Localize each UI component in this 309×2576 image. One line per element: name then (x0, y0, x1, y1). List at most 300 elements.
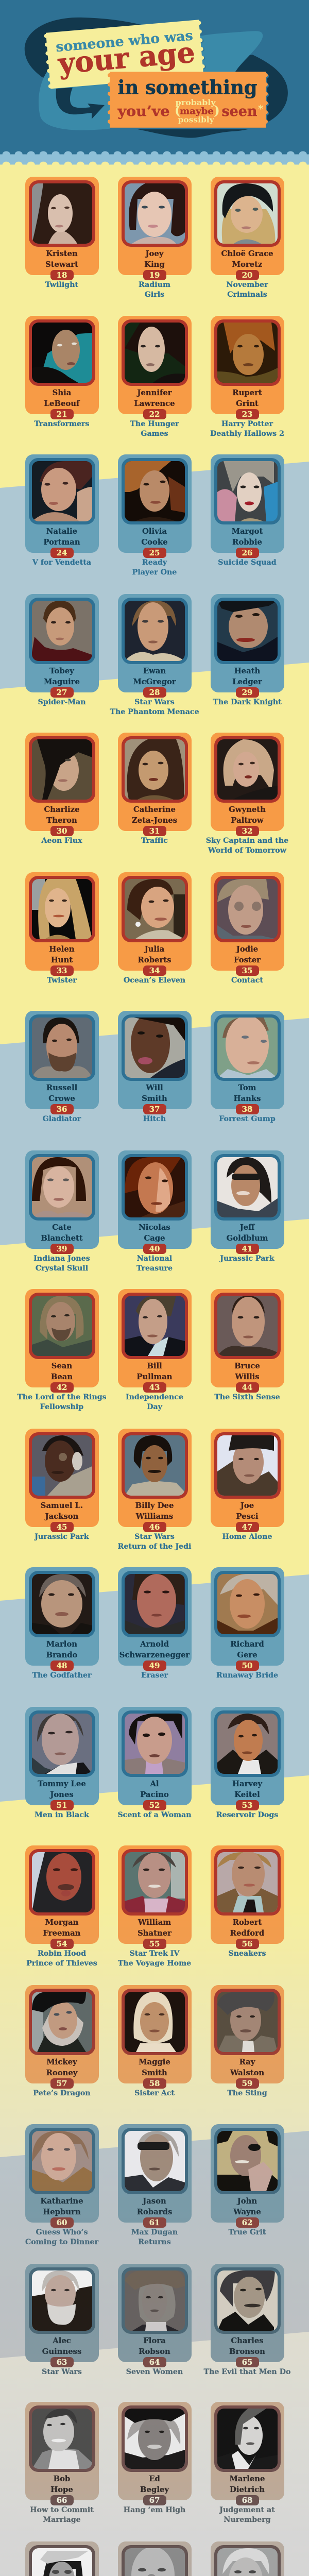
movie (102, 1532, 207, 1552)
portrait: Margot Robbie (217, 461, 278, 521)
name (195, 944, 300, 965)
age badge: 55 (149, 1939, 160, 1948)
age badge (50, 1244, 73, 1254)
card: Alec Guinness (25, 2264, 99, 2387)
age badge (143, 1800, 166, 1810)
name: Zeta-Jones (132, 816, 177, 825)
name (195, 1778, 300, 1800)
movie: Pete’s Dragon (33, 2089, 91, 2097)
movie: The Phantom Menace (110, 708, 199, 716)
age badge (50, 1800, 73, 1810)
card: Marlon Brando (25, 1567, 99, 1691)
portrait: Russell Crowe (32, 1018, 92, 1078)
name: Ed (149, 2475, 160, 2483)
name: Marlene (230, 2475, 265, 2483)
name: Jennifer (137, 388, 172, 397)
age badge (50, 1660, 73, 1671)
portrait: Charles Bronson (217, 2270, 277, 2331)
name: Brando (46, 1651, 77, 1659)
age badge (236, 1244, 259, 1254)
movie: The Dark Knight (213, 698, 282, 706)
name: Pesci (236, 1512, 259, 1521)
age badge: 28 (149, 688, 160, 697)
movie: Harry Potter (221, 420, 273, 428)
card: Helen Hunt (25, 872, 99, 996)
blob: dark right (135, 55, 288, 138)
movie: Runaway Bride (216, 1671, 278, 1680)
movie: Forrest Gump (219, 1115, 276, 1123)
name: Gwyneth (229, 805, 266, 814)
card: Jimmy Durante (117, 2541, 192, 2576)
ticket: in something you've (maybe) seen: in something (117, 76, 258, 99)
name (102, 1778, 207, 1800)
movie: Star Wars (134, 1533, 175, 1541)
name: Will (146, 1083, 163, 1092)
name: Cage (144, 1234, 165, 1243)
portrait: Flora Robson (125, 2270, 184, 2331)
age badge (143, 2495, 166, 2505)
age badge (236, 1660, 259, 1671)
name: Foster (234, 956, 261, 964)
name: Cooke (141, 538, 168, 547)
ticket: in something you've (maybe) seen: seen (221, 104, 258, 120)
name: Nicolas (139, 1223, 170, 1232)
card: Chloë Grace Moretz (211, 177, 284, 299)
name (102, 1222, 207, 1244)
name: Wayne (233, 2208, 261, 2216)
card: Heath Ledger (210, 594, 284, 718)
name: Robbie (232, 538, 262, 547)
name: Theron (46, 816, 77, 825)
portrait: Jimmy Durante (125, 2548, 184, 2576)
movie: Aeon Flux (41, 837, 82, 845)
card: Harvey Keitel (210, 1707, 284, 1831)
name (134, 388, 175, 408)
name (195, 2473, 300, 2495)
movie: The Voyage Home (118, 1959, 191, 1968)
movie (110, 698, 199, 716)
movie: Hitch (143, 1115, 166, 1123)
age badge (236, 1939, 259, 1949)
movie: Home Alone (222, 1533, 272, 1541)
age badge (236, 2357, 259, 2367)
age badge (50, 2495, 73, 2505)
name (195, 666, 300, 687)
portrait: Olivia Cooke (125, 461, 185, 521)
age badge: 53 (242, 1801, 252, 1810)
movie: Judgement at (219, 2506, 275, 2514)
name (195, 1222, 300, 1244)
age badge (143, 548, 166, 558)
portrait: Tobey Maguire (32, 601, 92, 661)
name: Robert (233, 1918, 262, 1927)
age badge: 52 (149, 1801, 160, 1810)
name (9, 1639, 114, 1660)
name: Catherine (133, 805, 176, 814)
age badge: 62 (242, 2218, 252, 2227)
movie (9, 1949, 114, 1969)
name: McGregor (133, 677, 176, 686)
name: Freeman (43, 1929, 80, 1938)
portrait: Tommy Lee Jones (32, 1714, 92, 1774)
card: Bill Pullman (117, 1289, 192, 1413)
age badge: 65 (242, 2358, 252, 2367)
name (9, 944, 114, 965)
age badge: 40 (149, 1244, 160, 1253)
name: Bronson (229, 2347, 265, 2356)
movie: Player One (132, 568, 177, 577)
age badge (143, 1660, 166, 1671)
name: Lawrence (134, 399, 175, 408)
movie: Jurassic Park (35, 1533, 89, 1541)
name (9, 1361, 114, 1382)
age badge: 49 (149, 1661, 160, 1670)
age badge: 60 (57, 2218, 67, 2227)
age badge: 68 (242, 2496, 252, 2505)
portrait: Heath Ledger (217, 601, 277, 661)
ticket: in something you've (maybe) seen: probably (176, 98, 216, 107)
portrait: Jennifer Lawrence (125, 323, 185, 383)
portrait: Bruce Willis (217, 1296, 277, 1356)
age badge: 57 (57, 2079, 67, 2088)
name (232, 388, 262, 408)
name: Marlon (46, 1640, 77, 1649)
card: Robert Redford (210, 1845, 284, 1969)
age badge: 32 (242, 826, 252, 836)
movie: Marriage (43, 2516, 81, 2524)
age badge: 58 (149, 2079, 160, 2088)
age badge (50, 1104, 73, 1114)
movie: Twilight (45, 281, 78, 289)
name (195, 804, 300, 826)
card: Billy Dee Williams (117, 1429, 192, 1552)
name: Hunt (51, 956, 73, 964)
portrait: Bill Pullman (125, 1296, 184, 1356)
age badge (50, 687, 73, 698)
age badge (143, 1522, 166, 1532)
card: Maggie Smith (117, 1985, 192, 2109)
card: Buster Keaton (25, 2541, 99, 2576)
ticket: your age (44, 20, 207, 89)
name: Moretz (232, 260, 262, 269)
name: King (144, 260, 165, 269)
card: Shia LeBeouf (25, 316, 99, 428)
name: Shatner (138, 1929, 171, 1938)
movie: Star Trek IV (130, 1950, 179, 1958)
ticket: your age: someone who was (55, 28, 194, 55)
name: Hanks (234, 1094, 261, 1103)
name (102, 2335, 207, 2357)
card: Joe Pesci (210, 1429, 284, 1552)
name (9, 2057, 114, 2078)
age badge (143, 687, 166, 698)
age badge (50, 1382, 73, 1393)
age badge: 44 (242, 1383, 252, 1392)
name: Russell (46, 1083, 77, 1092)
portrait: Gwyneth Paltrow (217, 739, 277, 800)
name (133, 667, 176, 686)
age badge (50, 826, 73, 836)
age badge: 61 (149, 2218, 160, 2227)
portrait: Helen Hunt (32, 879, 92, 939)
name: Stewart (45, 260, 78, 269)
age badge: 27 (57, 688, 67, 697)
movie (102, 1949, 207, 1969)
portrait: Samuel L. Jackson (32, 1435, 92, 1496)
age badge (236, 1104, 259, 1114)
movie: The Godfather (32, 1671, 92, 1680)
movie: The Lord of the Rings (17, 1393, 107, 1401)
movie: Ready (142, 558, 167, 567)
portrait: Ewan McGregor (125, 601, 185, 661)
age badge: 30 (57, 826, 67, 836)
name (102, 944, 207, 965)
card: Bob Hope (25, 2402, 99, 2526)
portrait: Al Pacino (125, 1714, 184, 1774)
card: Joey King (118, 177, 192, 299)
name: Tommy Lee (38, 1780, 86, 1788)
age badge (236, 1382, 259, 1393)
age badge (143, 270, 166, 280)
name: Cate (52, 1223, 72, 1232)
age badge: 38 (242, 1105, 252, 1114)
movie: National (137, 1255, 172, 1263)
movie: Spider-Man (38, 698, 86, 706)
portrait: Jodie Foster (217, 879, 277, 939)
card: Flora Robson (117, 2264, 192, 2387)
age badge: 51 (57, 1801, 67, 1810)
card: John Houseman (210, 2541, 284, 2576)
age badge (143, 1104, 166, 1114)
name (102, 1361, 207, 1382)
card: Ray Walston (210, 1985, 284, 2109)
portrait: Bob Hope (32, 2409, 92, 2469)
portrait: Julia Roberts (125, 879, 184, 939)
age badge (143, 1382, 166, 1393)
movie (130, 420, 179, 438)
portrait: Harvey Keitel (217, 1714, 277, 1774)
portrait: Natalie Portman (32, 461, 92, 521)
movie: Ocean’s Eleven (124, 976, 185, 985)
movie: Hang ‘em High (124, 2506, 185, 2514)
name: Redford (230, 1929, 264, 1938)
age badge: 46 (149, 1522, 160, 1532)
movie: Sneakers (228, 1950, 266, 1958)
name: Chloë Grace (221, 249, 273, 258)
portrait: John Wayne (217, 2131, 277, 2191)
age badge (143, 409, 166, 419)
name: Helen (49, 945, 75, 954)
age badge: 50 (242, 1661, 252, 1670)
card: Natalie Portman (25, 454, 99, 567)
card: William Shatner (117, 1845, 192, 1969)
card: Jodie Foster (210, 872, 284, 996)
ticket: in something you've (maybe) seen: maybe (180, 106, 214, 116)
movie: Girls (145, 291, 164, 299)
movie: The Sixth Sense (214, 1393, 280, 1401)
movie: Star Wars (134, 698, 175, 706)
name: Blanchett (41, 1234, 83, 1243)
name: Hepburn (43, 2208, 81, 2216)
portrait: Joey King (125, 183, 185, 244)
name (102, 2057, 207, 2078)
name: Gere (237, 1651, 258, 1659)
age badge: 20 (242, 270, 252, 280)
movie: True Grit (229, 2228, 266, 2236)
name: Goldblum (227, 1234, 268, 1243)
movie: Treasure (136, 1264, 173, 1273)
name: Maggie (139, 2058, 170, 2066)
name: Tobey (49, 667, 74, 675)
name: Heath (234, 667, 260, 675)
blob: mid blue boomerang (39, 31, 263, 130)
name: Willis (235, 1372, 260, 1381)
age badge (143, 2217, 166, 2228)
age badge: 19 (149, 270, 160, 280)
arrow (56, 88, 105, 119)
movie: November (226, 281, 268, 289)
name: Jason (143, 2197, 166, 2206)
card: Olivia Cooke (118, 454, 192, 577)
age badge: 21 (57, 410, 67, 419)
name: Paltrow (231, 816, 264, 825)
movie: Men in Black (35, 1811, 89, 1819)
age badge: 37 (149, 1105, 160, 1114)
name (9, 1778, 114, 1800)
movie: Reservoir Dogs (216, 1811, 278, 1819)
movie: Gladiator (43, 1115, 81, 1123)
name: Alec (53, 2336, 71, 2345)
movie: Coming to Dinner (25, 2238, 98, 2246)
age badge (50, 1522, 73, 1532)
name: Guinness (42, 2347, 81, 2356)
ticket: in something you've (maybe) seen: * (258, 103, 264, 115)
name (9, 2473, 114, 2495)
name: John (237, 2197, 257, 2206)
age badge (143, 2357, 166, 2367)
portrait: Buster Keaton (32, 2548, 92, 2576)
name (44, 388, 80, 408)
name: Pacino (140, 1790, 169, 1799)
movie: Transformers (34, 420, 90, 428)
portrait: Kristen Stewart (32, 183, 92, 244)
name: Bob (54, 2475, 70, 2483)
portrait: Ray Walston (217, 1992, 277, 2052)
portrait: Catherine Zeta-Jones (125, 739, 184, 800)
portrait: Alec Guinness (32, 2270, 92, 2331)
movie: Guess Who’s (36, 2228, 88, 2236)
age badge (236, 409, 259, 419)
age badge (236, 2495, 259, 2505)
age badge (50, 2217, 73, 2228)
age badge: 24 (57, 548, 67, 557)
name: Katharine (40, 2197, 83, 2206)
age badge (50, 1939, 73, 1949)
age badge: 31 (149, 826, 160, 836)
movie: Indiana Jones (33, 1255, 90, 1263)
name (141, 527, 168, 547)
card: Ed Begley (117, 2402, 192, 2526)
portrait: Maggie Smith (125, 1992, 184, 2052)
card: Bruce Willis (210, 1289, 284, 1413)
ticket: in something you've (maybe) seen (108, 72, 269, 129)
ticket: in something you've (maybe) seen: ( (175, 103, 181, 118)
title block (25, 18, 288, 138)
name: Ray (239, 2058, 255, 2066)
portrait: Marlon Brando (32, 1574, 92, 1634)
movie: Independence (126, 1393, 183, 1401)
name (9, 804, 114, 826)
card: Katharine Hepburn (25, 2124, 99, 2248)
portrait: Robert Redford (217, 1852, 277, 1912)
name: Julia (145, 945, 164, 954)
portrait: Jeff Goldblum (217, 1157, 277, 1217)
name (144, 249, 165, 269)
age badge (143, 826, 166, 836)
movie: Prince of Thieves (26, 1959, 97, 1968)
movie (195, 2505, 300, 2525)
movie: Crystal Skull (36, 1264, 88, 1273)
age badge: 43 (149, 1383, 160, 1392)
movie: Seven Women (126, 2368, 183, 2376)
age badge: 56 (242, 1939, 252, 1948)
name: Joe (241, 1501, 254, 1510)
blob: dark left (25, 18, 165, 88)
age badge: 23 (242, 410, 252, 419)
age badge: 26 (242, 548, 252, 557)
age badge (236, 270, 259, 280)
name (45, 249, 78, 269)
age badge (236, 687, 259, 698)
movie: The Hunger (130, 420, 179, 428)
age badge (143, 965, 166, 976)
name: Williams (136, 1512, 173, 1521)
name: Smith (142, 2069, 167, 2077)
name: Jackson (45, 1512, 78, 1521)
portrait: Cate Blanchett (32, 1157, 92, 1217)
name (9, 1500, 114, 1522)
movie (132, 558, 177, 577)
movie (9, 1254, 114, 1274)
age badge: 64 (149, 2358, 160, 2367)
movie: Nuremberg (224, 2516, 271, 2524)
card: Richard Gere (210, 1567, 284, 1691)
age badge: 47 (242, 1522, 252, 1532)
name (43, 527, 80, 547)
age badge: 34 (149, 966, 160, 975)
name: Jeff (240, 1223, 254, 1232)
card: Marlene Dietrich (210, 2402, 284, 2526)
age badge: 39 (57, 1244, 67, 1253)
movie: Star Wars (42, 2368, 82, 2376)
ticket: in something you've (maybe) seen: possibly (178, 115, 215, 125)
name (195, 1917, 300, 1939)
age badge: 42 (57, 1383, 67, 1392)
movie (102, 1393, 207, 1412)
movie (102, 1254, 207, 1274)
portrait: Rupert Grint (217, 323, 278, 383)
name: Robson (139, 2347, 170, 2356)
movie: Suicide Squad (218, 558, 277, 567)
age badge: 29 (242, 688, 252, 697)
name: Shia (53, 388, 71, 397)
name (102, 2473, 207, 2495)
movie (9, 1393, 114, 1412)
movie: Max Dugan (131, 2228, 178, 2236)
movie: How to Commit (30, 2506, 94, 2514)
name: Morgan (45, 1918, 78, 1927)
movie (195, 836, 300, 856)
